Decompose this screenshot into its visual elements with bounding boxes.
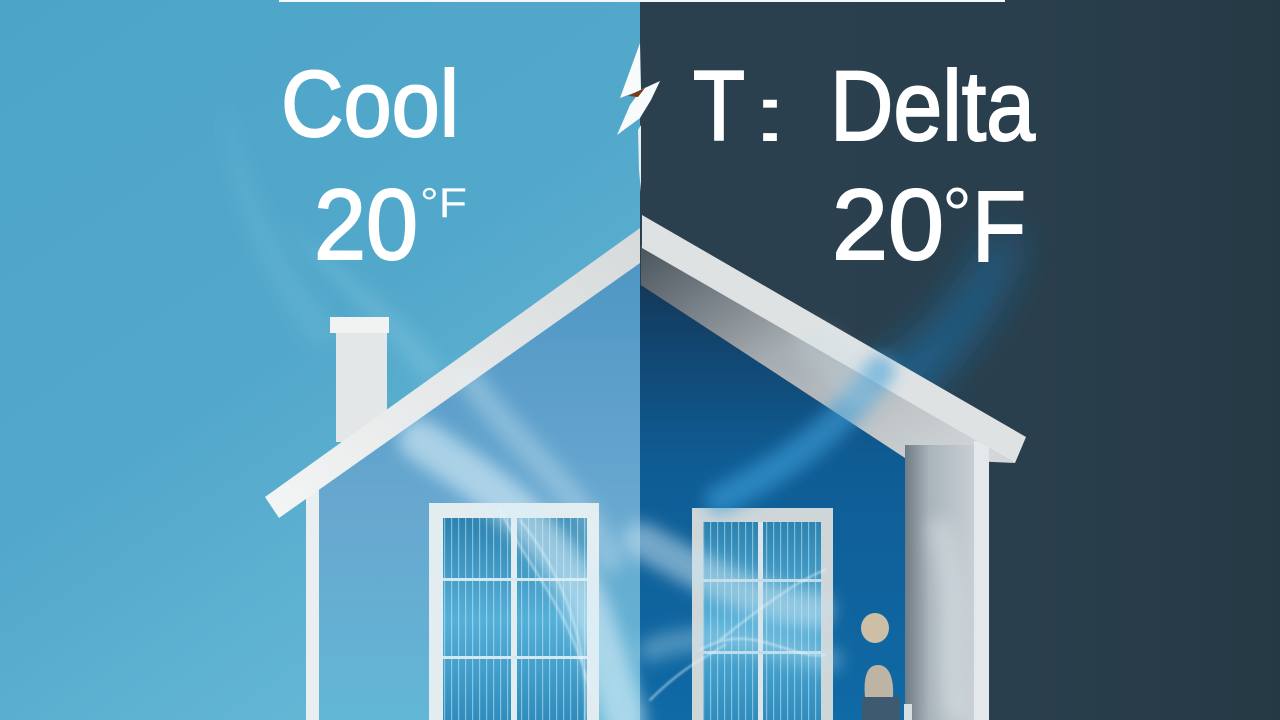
right pillar	[905, 445, 975, 720]
left corner post	[306, 490, 319, 720]
right wall	[640, 285, 905, 720]
interior decor: vase and lamp	[861, 613, 912, 720]
unit: right degree: °	[942, 172, 972, 256]
background: cool left half	[0, 0, 640, 720]
value: right 20: 20	[832, 169, 944, 281]
right roof	[642, 215, 1026, 463]
heading: Delta: Delta	[830, 50, 1036, 161]
left wall	[318, 255, 640, 720]
unit: left degree F: °F	[420, 179, 467, 226]
airflow wisps across house	[420, 345, 955, 720]
heading: Cool: Cool	[281, 51, 459, 156]
left roof	[265, 228, 640, 518]
background: dark right half	[640, 0, 1280, 720]
heading: colon: :	[750, 70, 790, 158]
pillar white stripe	[974, 441, 989, 720]
unit: right F: F	[972, 171, 1026, 283]
soffit shadow	[641, 245, 1015, 463]
value: left 20: 20	[314, 169, 418, 281]
heading: T: T	[693, 50, 745, 161]
top white bar	[279, 0, 1005, 2]
chimney	[330, 317, 389, 442]
background glow: air wisps behind house	[225, 100, 1020, 440]
lightning bolt divider	[617, 43, 660, 192]
house: right dark side	[640, 215, 1026, 720]
window: left	[429, 503, 599, 720]
house: left cool side	[265, 228, 640, 720]
window: right	[692, 508, 833, 720]
